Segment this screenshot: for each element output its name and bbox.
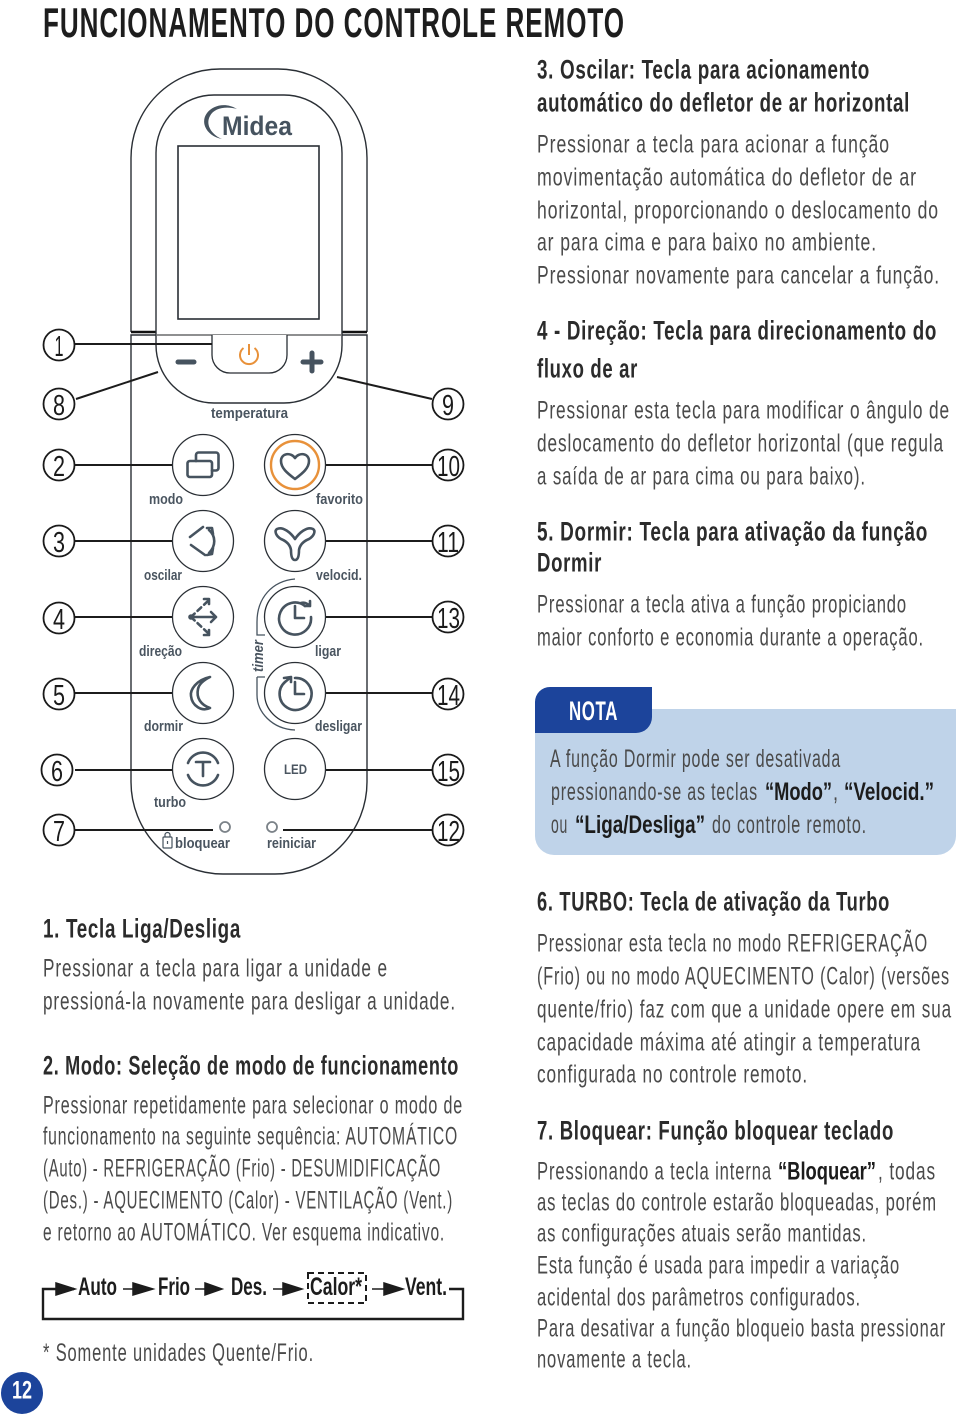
arrows: [52, 1283, 403, 1295]
button labels: [139, 492, 363, 852]
button labels: favorito: [316, 492, 363, 508]
dashed box: [308, 1273, 366, 1303]
timer bracket: timer: [250, 639, 267, 672]
flow labels: Des.: [231, 1273, 267, 1301]
nota text: ou: [551, 811, 568, 839]
nota text: pressionando-se as teclas: [551, 778, 758, 806]
page number badge: 12: [12, 1376, 32, 1404]
numbered callouts, right: 9: [442, 390, 454, 422]
button labels: reiniciar: [267, 836, 316, 852]
numbered callouts, left: 1: [54, 331, 64, 363]
button: LED: LED: [284, 761, 307, 777]
timer bracket: [250, 579, 295, 730]
nota text: “Velocid.”: [844, 778, 934, 806]
numbered callouts, left: 2: [53, 451, 65, 483]
flow labels: Vent.: [405, 1273, 447, 1301]
button: dormir: [172, 662, 234, 724]
section 2: Modo: [43, 1050, 463, 1246]
minus key: [178, 360, 194, 364]
lock icon: [163, 832, 172, 848]
plus key: [303, 353, 321, 371]
inner shell: [156, 95, 342, 403]
button: desligar timer: [264, 662, 326, 724]
section 7: Bloquear: novamente a tecla.: [537, 1346, 692, 1374]
button labels: modo: [149, 492, 183, 508]
button labels: bloquear: [175, 836, 230, 852]
bloquear indicator: [220, 822, 230, 832]
numbered callouts, left: 6: [51, 756, 63, 788]
nota text: do controle remoto.: [712, 811, 867, 839]
button labels: oscilar: [144, 568, 182, 584]
button: velocid.: [264, 510, 326, 572]
section 3: Oscilar: [537, 54, 940, 290]
page number badge: [1, 1372, 43, 1414]
button: favorito: [264, 434, 326, 496]
section 7: Bloquear: “Bloquear”: [778, 1158, 876, 1186]
label: temperatura: temperatura: [211, 406, 289, 422]
section 2: Modo: e retorno ao AUTOMÁTICO. Ver esquema indicativo.: [43, 1218, 445, 1246]
section 2: Modo: (Auto) - REFRIGERAÇÃO (Frio) - DESUMIDIFICAÇÃO: [43, 1154, 441, 1182]
reiniciar indicator: [267, 822, 277, 832]
nota tab: [535, 687, 652, 733]
section 1: Liga/Desliga: [43, 914, 456, 1016]
button: ligar timer: [264, 586, 326, 648]
nota heading: NOTA: [569, 696, 618, 726]
section 6: Turbo: configurada no controle remoto.: [537, 1060, 808, 1088]
nota text: [550, 745, 934, 839]
callout: nota: [535, 687, 956, 855]
section 7: Bloquear: Pressionando a tecla interna: [537, 1158, 772, 1186]
separator: [156, 334, 342, 336]
flow labels: Auto: [78, 1273, 117, 1301]
flow labels: [78, 1273, 447, 1301]
section 7: Bloquear: [537, 1116, 946, 1374]
numbered callouts, left: [42, 330, 74, 848]
mode sequence flow diagram: [43, 1273, 463, 1319]
nota text: “Liga/Desliga”: [575, 811, 705, 839]
section 2: Modo: 2. Modo: Seleção de modo de funcionamento: [43, 1050, 459, 1080]
return loop: [43, 1289, 463, 1319]
numbered callouts, left: 3: [53, 527, 65, 559]
button labels: desligar: [315, 719, 362, 735]
nota text: “Modo”: [765, 778, 832, 806]
footnote: * Somente unidades Quente/Frio.: [43, 1339, 314, 1367]
numbered callouts, right: 12: [437, 816, 460, 848]
numbered callouts, left: 7: [53, 816, 65, 848]
logo: Midea: Midea: [222, 111, 293, 141]
logo: Midea: [204, 105, 293, 141]
button: direção: [172, 586, 234, 648]
button labels: turbo: [154, 795, 186, 811]
numbered callouts, right: 14: [437, 680, 460, 712]
section 7: Bloquear: , todas: [878, 1158, 936, 1186]
section 4: Direção: [537, 316, 950, 490]
nota panel: [535, 709, 956, 855]
button: oscilar: [172, 510, 234, 572]
remote control diagram: [42, 69, 464, 874]
nota text: ,: [833, 778, 839, 806]
leader lines: [75, 344, 432, 830]
section 4: Direção: fluxo de ar: [537, 354, 638, 384]
numbered callouts, right: 11: [437, 527, 459, 559]
button labels: ligar: [315, 644, 341, 660]
section 5: Dormir: [537, 516, 928, 652]
display screen: [178, 146, 319, 319]
section 6: Turbo: [537, 886, 952, 1088]
numbered callouts, left: 8: [53, 390, 65, 422]
flow labels: Frio: [158, 1273, 190, 1301]
button: turbo: [172, 738, 234, 800]
section 2: Modo: Pressionar repetidamente para selecionar o modo de: [43, 1092, 463, 1120]
section 2: Modo: funcionamento na seguinte sequência: AUTOMÁTICO: [43, 1122, 458, 1150]
section 5: Dormir: Dormir: [537, 548, 602, 578]
power button: [212, 335, 287, 373]
section 1: Liga/Desliga: pressioná-la novamente para desligar a unidade.: [43, 988, 456, 1016]
remote lower body: [131, 335, 367, 874]
numbered callouts, left: 5: [53, 680, 65, 712]
button labels: dormir: [144, 719, 183, 735]
button labels: velocid.: [316, 568, 362, 584]
numbered callouts, right: 13: [437, 603, 460, 635]
flow labels: Calor*: [310, 1273, 362, 1301]
numbered callouts, right: 15: [437, 756, 460, 788]
numbered callouts, right: [432, 388, 464, 848]
numbered callouts, left: 4: [53, 604, 65, 636]
button: LED: [264, 738, 326, 800]
section 1: Liga/Desliga: Pressionar a tecla para ligar a unidade e: [43, 954, 388, 982]
section 1: Liga/Desliga: 1. Tecla Liga/Desliga: [43, 914, 241, 944]
section 2: Modo: (Des.) - AQUECIMENTO (Calor) - VENTILAÇÃO (Vent.): [43, 1186, 453, 1214]
button labels: direção: [139, 644, 182, 660]
numbered callouts, right: 10: [437, 451, 460, 483]
button: modo: [172, 434, 234, 496]
remote upper body: [131, 69, 367, 332]
